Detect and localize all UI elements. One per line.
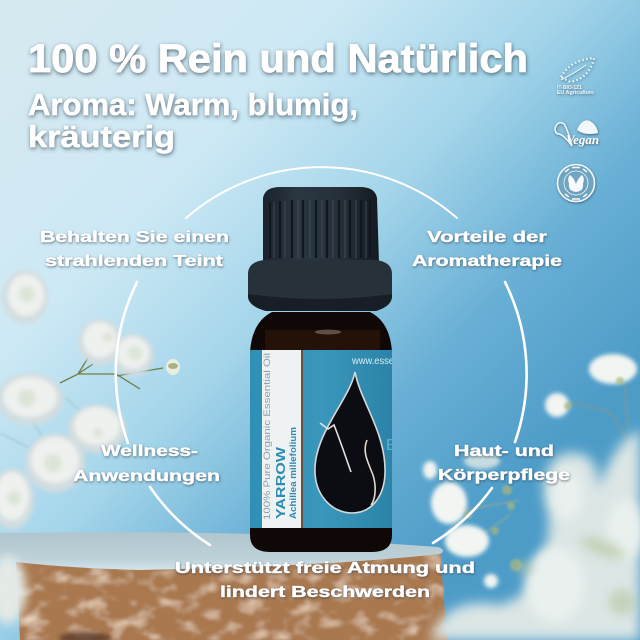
subtitle: aroma: Aroma: Warm, blumig, (28, 87, 358, 122)
icon: EU organic leaf: EU Agriculture (557, 90, 594, 96)
bottle body (250, 312, 392, 552)
benefit label: skin and body care: Körperpflege (438, 467, 571, 484)
benefit label: radiant complexion: strahlenden Teint (45, 253, 223, 270)
bottle label: Achillea millefolium (288, 427, 298, 519)
product bottle (248, 187, 397, 552)
bottle label: E (386, 437, 397, 454)
flowers: left sprig (0, 270, 180, 529)
benefit label: wellness: Wellness- (101, 443, 198, 460)
benefit label: breathing: lindert Beschwerden (220, 584, 430, 601)
benefit label: radiant complexion (40, 229, 229, 270)
decorative ring (116, 167, 527, 545)
benefit label: wellness (73, 443, 220, 485)
dropper cap (248, 187, 392, 311)
bottle label (250, 350, 397, 528)
subtitle: aroma (28, 87, 358, 154)
title: 100 % Rein und Natürlich (28, 37, 528, 81)
benefit label: aromatherapy (412, 229, 563, 270)
benefit label: wellness: Anwendungen (73, 468, 220, 485)
benefit label: skin and body care: Haut- und (454, 443, 554, 460)
benefit label: skin and body care (438, 443, 571, 484)
benefit label: radiant complexion: Behalten Sie einen (40, 229, 229, 246)
icon: no animal testing (558, 164, 594, 202)
foreground blur: white flowers bottom right (0, 430, 640, 640)
bottle label: www.esse (351, 355, 394, 367)
icon: vegan (555, 120, 599, 147)
bottle label: YARROW (273, 446, 288, 519)
benefit label: aromatherapy: Aromatherapie (412, 253, 563, 270)
subtitle: aroma: kräuterig (28, 119, 175, 154)
plinth: stone slab and rock (0, 532, 447, 640)
benefit label: aromatherapy: Vorteile der (427, 229, 547, 246)
icon: EU organic leaf: IT-BIO-121 (557, 85, 582, 91)
benefit label: breathing: Unterstützt freie Atmung und (175, 560, 475, 577)
teardrop emblem (315, 372, 385, 513)
icon: vegan: Vegan (566, 132, 599, 147)
benefit label: breathing (175, 560, 475, 601)
bottle label: 100% Pure Organic Essential Oil (262, 353, 272, 520)
flowers: right sprig (423, 354, 637, 588)
icon: EU organic leaf (557, 58, 594, 96)
